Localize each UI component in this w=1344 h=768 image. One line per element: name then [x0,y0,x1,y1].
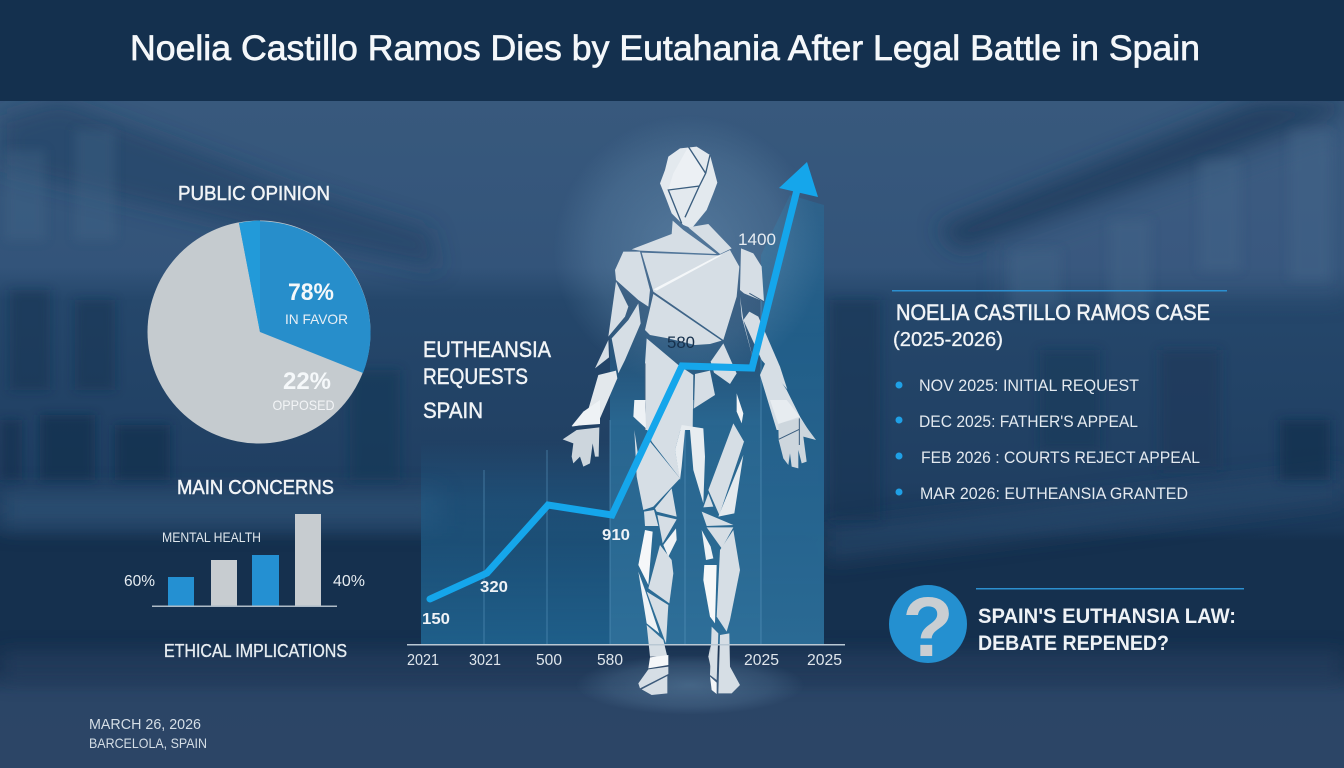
x axis labels: 2025 [744,652,779,669]
pie chart: IN FAVOR [285,311,348,327]
timeline items: NOV 2025: INITIAL REQUEST [919,376,1139,395]
bar chart: concerns: 40% [333,573,365,590]
panel: public opinion [148,183,371,444]
lower body [563,400,816,695]
panel: case timeline: (2025-2026) [893,329,1003,351]
rising trend arrow [430,162,818,599]
heading: eutheansia requests spain: REQUESTS [423,364,528,389]
chart columns backdrop [421,115,824,715]
pie chart: 22% [283,368,331,395]
panel: case timeline [892,290,1227,503]
header bar [0,0,1344,101]
callout: debate reopened: SPAIN'S EUTHANSIA LAW: [978,605,1236,628]
panel: main concerns [124,477,365,661]
callout: debate reopened [889,580,1244,674]
value labels: 150 [422,611,450,628]
bar chart: concerns: 60% [124,573,155,590]
left hand [563,427,599,467]
x axis labels [407,652,842,669]
x axis labels: 2025 [807,652,842,669]
pie chart: OPPOSED [272,397,334,413]
pie chart [148,220,371,444]
label: mental health: MENTAL HEALTH [162,529,261,545]
timeline items: FEB 2026 : COURTS REJECT APPEAL [921,448,1200,467]
value labels: 1400 [738,230,776,249]
upper body [572,147,808,430]
title: Noelia Castillo Ramos Dies by Eutahania After Legal Battle in Spain [130,29,1200,68]
icon: question mark [889,580,967,674]
value labels: 910 [602,527,630,544]
line chart: eutheansia requests [407,162,845,669]
heading: case: NOELIA CASTILLO RAMOS CASE [896,300,1210,325]
right hand [778,418,816,468]
date and location: BARCELOLA, SPAIN [89,735,207,751]
x axis [407,644,845,646]
heading: public opinion: PUBLIC OPINION [178,183,330,205]
heading: eutheansia requests spain: SPAIN [423,398,483,423]
figure: fractured human body [563,147,816,695]
timeline items: DEC 2025: FATHER'S APPEAL [919,412,1138,431]
x axis labels: 500 [536,652,562,669]
label: ethical implications: ETHICAL IMPLICATIONS [164,641,347,661]
date and location: MARCH 26, 2026 [89,716,201,733]
heading: eutheansia requests spain [423,337,551,423]
icon: question mark: ? [902,580,954,674]
bar chart: concerns [124,514,365,607]
x axis labels: 3021 [469,652,501,669]
value labels: 580 [667,333,695,352]
value labels [422,230,776,628]
heading: main concerns: MAIN CONCERNS [177,477,334,499]
heading: eutheansia requests spain: EUTHEANSIA [423,337,551,362]
x axis labels: 580 [597,652,623,669]
x axis labels: 2021 [407,652,439,669]
date and location [89,716,207,751]
value labels: 320 [480,579,508,596]
pie chart: 78% [288,279,334,306]
timeline items [896,376,1200,503]
timeline items: MAR 2026: EUTHEANSIA GRANTED [920,484,1188,503]
callout: debate reopened: DEBATE REPENED? [978,632,1169,655]
